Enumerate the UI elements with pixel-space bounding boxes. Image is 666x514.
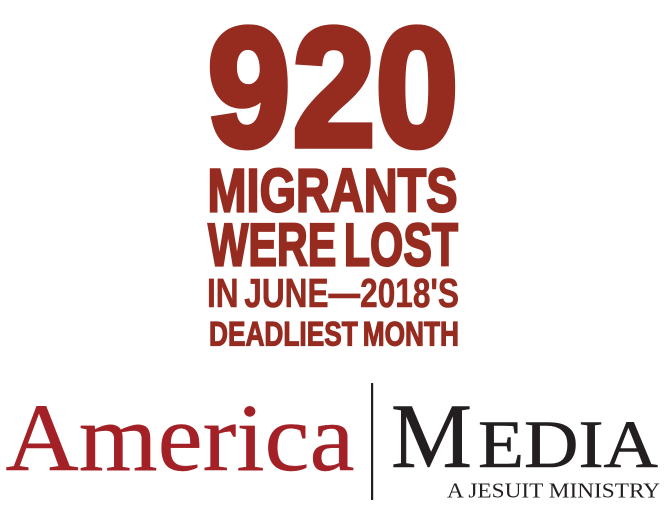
logo tagline: A JESUIT MINISTRY <box>447 478 660 502</box>
logo wordmark: America: America <box>6 384 354 491</box>
heading line: were lost: WERE LOST <box>208 212 458 278</box>
logo wordmark: Media: EDIA <box>478 406 658 482</box>
subheading line: in June: IN JUNE—2018'S <box>207 270 459 316</box>
heading line: migrants: MIGRANTS <box>208 156 458 224</box>
logo divider <box>371 383 373 500</box>
logo wordmark: Media <box>391 385 658 487</box>
subheading line: deadliest month: DEADLIEST MONTH <box>209 316 459 354</box>
headline number <box>208 0 458 181</box>
logo wordmark: Media: M <box>391 385 472 487</box>
